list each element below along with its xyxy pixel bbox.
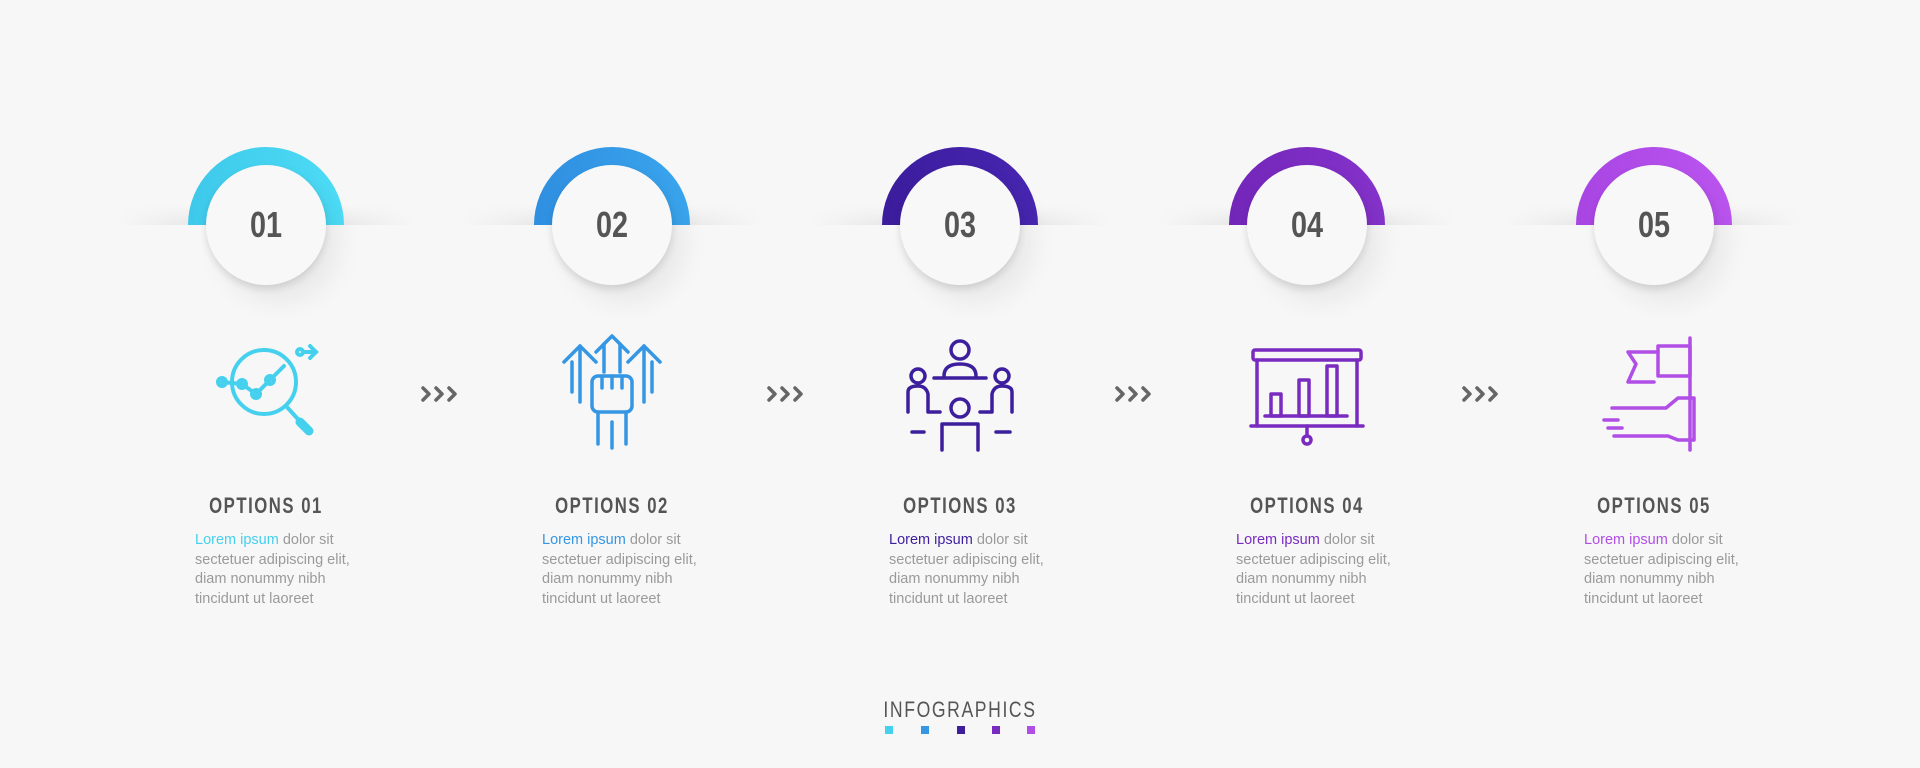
- option 2 text: sectetuer adipiscing elit,: [542, 552, 697, 568]
- number circle 05: 05: [1638, 204, 1670, 245]
- option 1 title: OPTIONS 01: [209, 493, 323, 518]
- option 1 text: diam nonummy nibh: [195, 571, 326, 587]
- number circle 03: [900, 165, 1020, 285]
- arrow 2: [767, 386, 803, 402]
- option 1 text: tincidunt ut laoreet: [195, 591, 314, 607]
- option 1 text: [195, 532, 350, 607]
- option 4 text: sectetuer adipiscing elit,: [1236, 552, 1391, 568]
- number circle 04: [1247, 165, 1367, 285]
- option 3 text: tincidunt ut laoreet: [889, 591, 1008, 607]
- option 2 text: [542, 532, 697, 607]
- option 2 text: Lorem ipsum dolor sit: [542, 532, 681, 548]
- option 4 title: OPTIONS 04: [1250, 493, 1364, 518]
- icon: fist with arrows: [562, 334, 662, 450]
- option 3 text: sectetuer adipiscing elit,: [889, 552, 1044, 568]
- option 4 text: Lorem ipsum dolor sit: [1236, 532, 1375, 548]
- option 5 text: diam nonummy nibh: [1584, 571, 1715, 587]
- option 5 title: OPTIONS 05: [1597, 493, 1711, 518]
- icon: hand holding flag: [1602, 336, 1696, 452]
- option 2 text: diam nonummy nibh: [542, 571, 673, 587]
- option 3 text: [889, 532, 1044, 607]
- option 3 title: OPTIONS 03: [903, 493, 1017, 518]
- option 5 text: [1584, 532, 1739, 607]
- option 4 text: tincidunt ut laoreet: [1236, 591, 1354, 607]
- timeline background shadows: [158, 216, 1762, 225]
- icon: presentation chart: [1249, 348, 1365, 446]
- number circle 02: 02: [596, 204, 628, 245]
- footer title: INFOGRAPHICS: [883, 697, 1037, 722]
- icon: magnifier analytics: [216, 344, 319, 436]
- option 1 text: Lorem ipsum dolor sit: [195, 532, 334, 548]
- option 4 text: [1236, 532, 1391, 607]
- option 2 text: tincidunt ut laoreet: [542, 591, 660, 607]
- number circle 05: [1594, 165, 1714, 285]
- footer color squares: [885, 726, 1035, 734]
- number circle 04: 04: [1291, 204, 1323, 245]
- option 3 text: diam nonummy nibh: [889, 571, 1020, 587]
- option 2 title: OPTIONS 02: [555, 493, 669, 518]
- number circle 02: [552, 165, 672, 285]
- arrow 3: [1115, 386, 1151, 402]
- arrow 1: [421, 386, 457, 402]
- number circle 03: 03: [944, 204, 976, 245]
- option 5 text: tincidunt ut laoreet: [1584, 591, 1702, 607]
- option 1 text: sectetuer adipiscing elit,: [195, 552, 350, 568]
- number circle 01: 01: [250, 204, 282, 245]
- option 4 text: diam nonummy nibh: [1236, 571, 1367, 587]
- option 5 text: Lorem ipsum dolor sit: [1584, 532, 1723, 548]
- icon: team meeting: [906, 339, 1014, 452]
- number circle 01: [206, 165, 326, 285]
- option 3 text: Lorem ipsum dolor sit: [889, 532, 1028, 548]
- arrow 4: [1462, 386, 1498, 402]
- option 5 text: sectetuer adipiscing elit,: [1584, 552, 1739, 568]
- arcs: [188, 147, 1732, 225]
